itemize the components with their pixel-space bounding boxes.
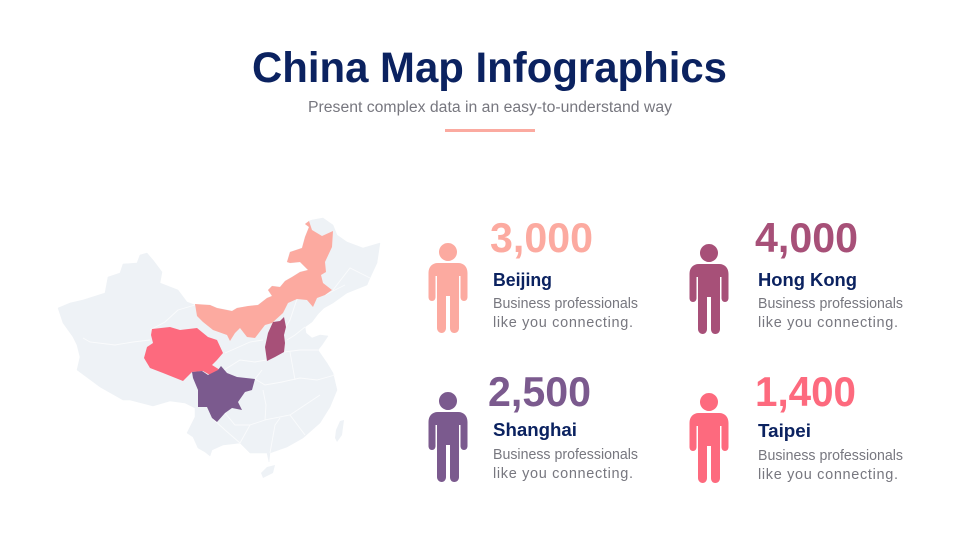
stat: Taipei [690, 368, 903, 483]
title underline [445, 129, 535, 132]
icon: person [690, 244, 728, 334]
region: Shanxi [265, 317, 286, 361]
province borders [83, 268, 370, 453]
icon: person [690, 393, 728, 483]
description: Business professionals [758, 296, 903, 312]
value: 1,400 [755, 368, 856, 415]
city name: Hong Kong [758, 270, 857, 290]
description: like you connecting. [493, 315, 633, 331]
region: Sichuan [192, 366, 255, 422]
description: Business professionals [758, 448, 903, 464]
stat: Hong Kong [690, 214, 903, 334]
description: like you connecting. [758, 467, 898, 483]
stat: Shanghai [428, 368, 638, 482]
region: Inner Mongolia [195, 221, 333, 341]
description: like you connecting. [493, 466, 633, 482]
value: 4,000 [755, 214, 858, 261]
map base: Taiwan [335, 420, 344, 442]
map base: mainland [58, 218, 380, 462]
city name: Taipei [758, 421, 811, 441]
description: Business professionals [493, 296, 638, 312]
region: Qinghai [144, 327, 223, 381]
stat: Beijing [428, 214, 638, 333]
description: Business professionals [493, 447, 638, 463]
city name: Shanghai [493, 420, 577, 440]
city name: Beijing [493, 270, 552, 290]
icon: person [428, 392, 468, 482]
value: 3,000 [490, 214, 593, 261]
subtitle: Present complex data in an easy-to-understand way [308, 99, 672, 116]
title: China Map Infographics [252, 44, 727, 92]
map base: Hainan [261, 465, 275, 478]
value: 2,500 [488, 368, 591, 415]
map of China [58, 218, 380, 478]
description: like you connecting. [758, 315, 898, 331]
icon: person [428, 243, 468, 333]
